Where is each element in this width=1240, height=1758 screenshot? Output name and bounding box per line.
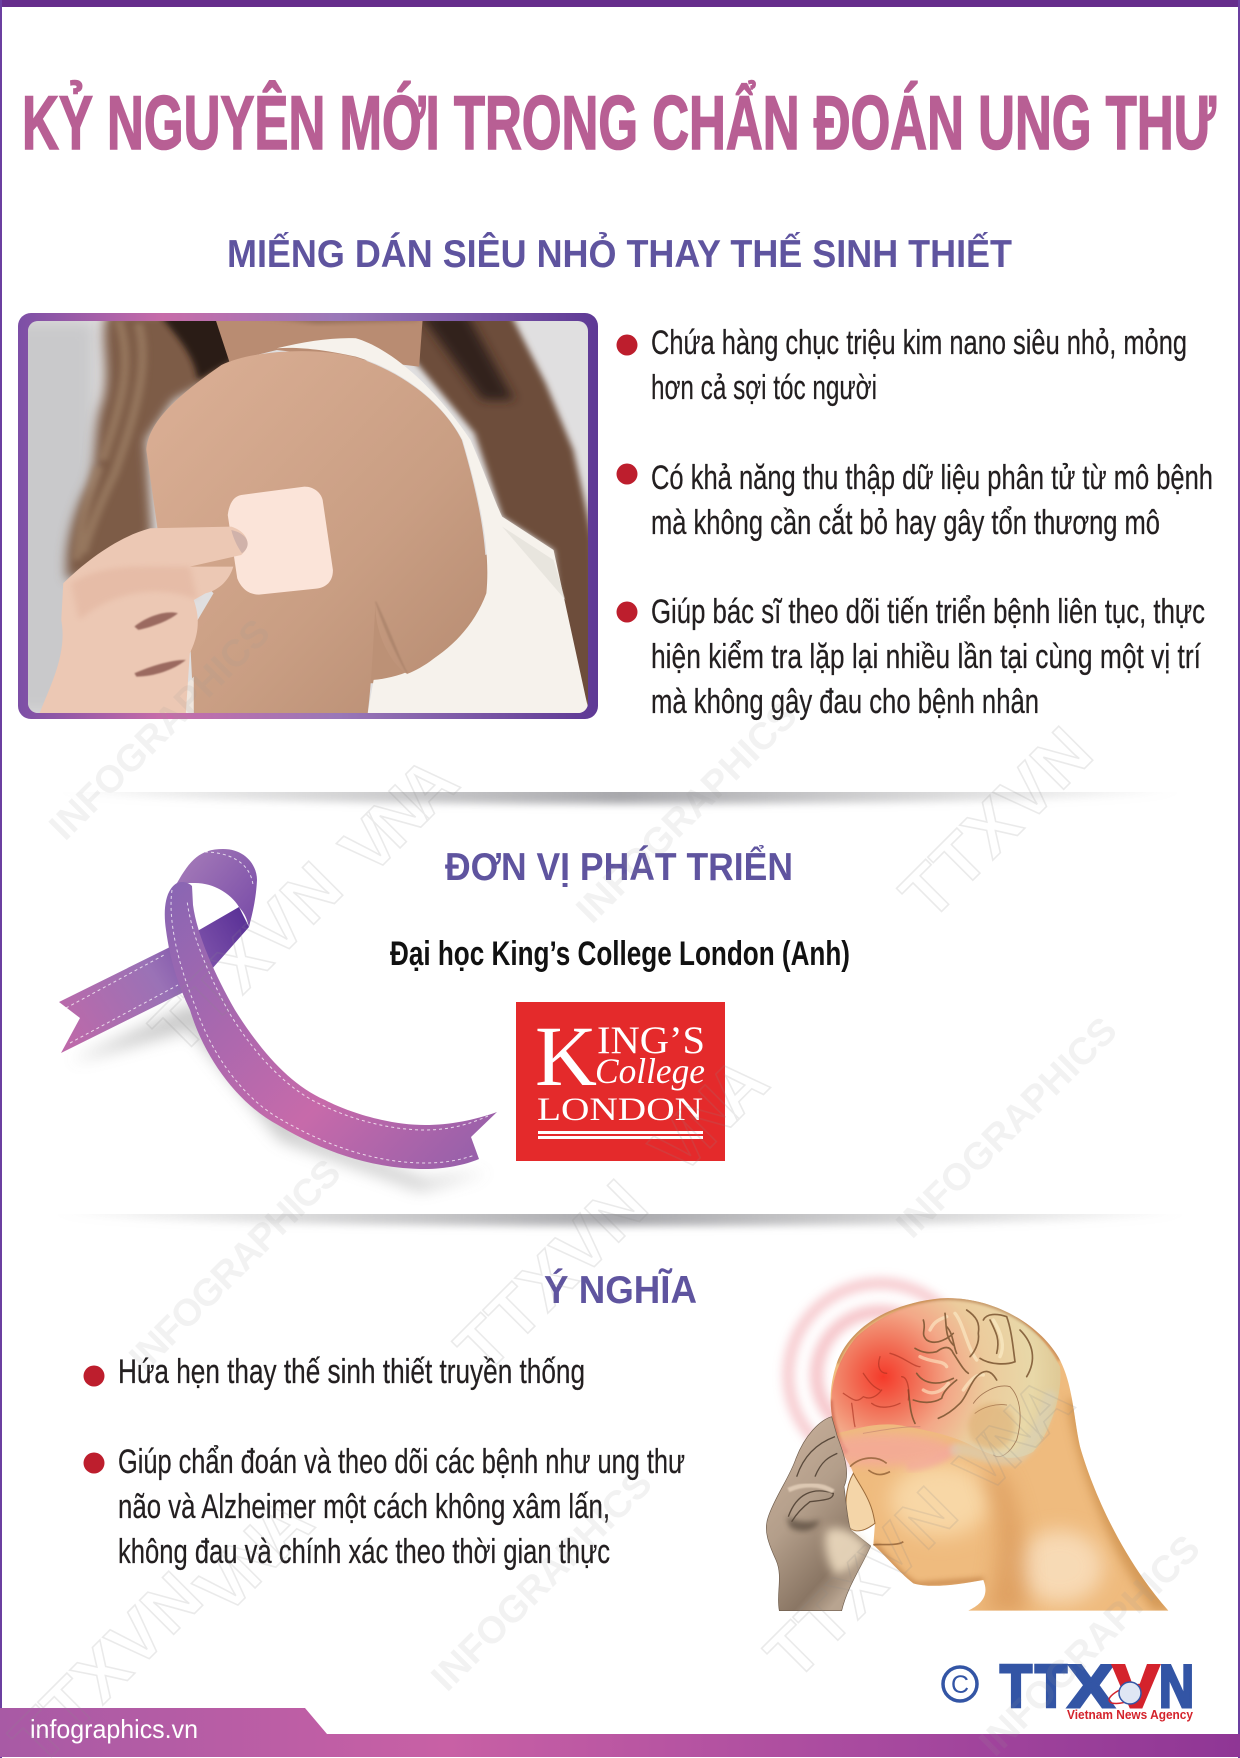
logo: TTXVN Vietnam News Agency: T (1035, 1653, 1067, 1720)
logo: King's College London (516, 1002, 725, 1161)
watermark: INFOGRAPHICS (889, 1009, 1126, 1246)
watermark: TTXVN (135, 847, 357, 1069)
watermark: VNA (635, 1042, 783, 1189)
bullet b: không đau và chính xác theo thời gian thực (118, 1533, 610, 1571)
watermark: VNA (180, 1482, 328, 1629)
logo: TTXVN Vietnam News Agency: Vietnam News Agency (1067, 1707, 1194, 1722)
watermark: TTXVN (750, 1472, 972, 1694)
bullet 2 (616, 459, 1213, 542)
bullet b: não và Alzheimer một cách không xâm lấn, (118, 1488, 610, 1526)
hand (766, 1417, 871, 1611)
bullet list: significance (84, 1353, 685, 1571)
bullet b: Giúp chẩn đoán và theo dõi các bệnh như ung thư (118, 1443, 685, 1481)
watermark: TTXVN (885, 712, 1107, 934)
watermark (0, 611, 1209, 1758)
footer website text: infographics.vn (30, 1714, 198, 1744)
watermark: INFOGRAPHICS (42, 611, 279, 848)
watermark: VNA (940, 1362, 1088, 1509)
bullet b (84, 1443, 685, 1571)
illustration: head with brain pain (766, 1283, 1173, 1613)
logo: TTXVN Vietnam News Agency: T (1000, 1653, 1032, 1720)
footer band (0, 1708, 1240, 1757)
icon: purple awareness ribbon (59, 849, 497, 1190)
watermark: VNA (325, 742, 473, 889)
bullet a: Hứa hẹn thay thế sinh thiết truyền thống (118, 1353, 585, 1391)
developer name: Đại học King’s College London (Anh) (390, 935, 850, 973)
bullet 3: mà không gây đau cho bệnh nhân (651, 683, 1039, 721)
watermark: INFOGRAPHICS (424, 1462, 661, 1699)
heading: patch: MIẾNG DÁN SIÊU NHỎ THAY THẾ SINH THIẾT (227, 232, 1012, 276)
logo: King's College London: College (595, 1051, 705, 1091)
bullet list: patch features (616, 324, 1213, 721)
watermark: INFOGRAPHICS (122, 1152, 349, 1379)
bullet 3 (616, 593, 1205, 721)
bullet 1: hơn cả sợi tóc người (651, 369, 877, 407)
photo: patch on upper arm (10, 313, 598, 719)
heading: significance: Ý NGHĨA (544, 1268, 697, 1312)
face details (846, 1473, 875, 1531)
logo: TTXVN Vietnam News Agency (943, 1653, 1194, 1722)
logo: TTXVN Vietnam News Agency: V (1113, 1653, 1159, 1720)
logo: TTXVN Vietnam News Agency: C (951, 1671, 969, 1699)
watermark: INFOGRAPHICS (569, 694, 806, 931)
logo: TTXVN Vietnam News Agency: N (1159, 1653, 1194, 1720)
heading: developer: ĐƠN VỊ PHÁT TRIỂN (445, 844, 793, 889)
logo: King's College London: LONDON (537, 1092, 703, 1128)
watermark: INFOGRAPHICS (972, 1527, 1209, 1758)
watermark: TTXVN (440, 1165, 662, 1387)
logo: King's College London: ING’S (597, 1019, 705, 1062)
bullet 1 (616, 324, 1187, 407)
logo: TTXVN Vietnam News Agency: X (1068, 1653, 1114, 1720)
logo: King's College London: K (535, 1008, 597, 1104)
